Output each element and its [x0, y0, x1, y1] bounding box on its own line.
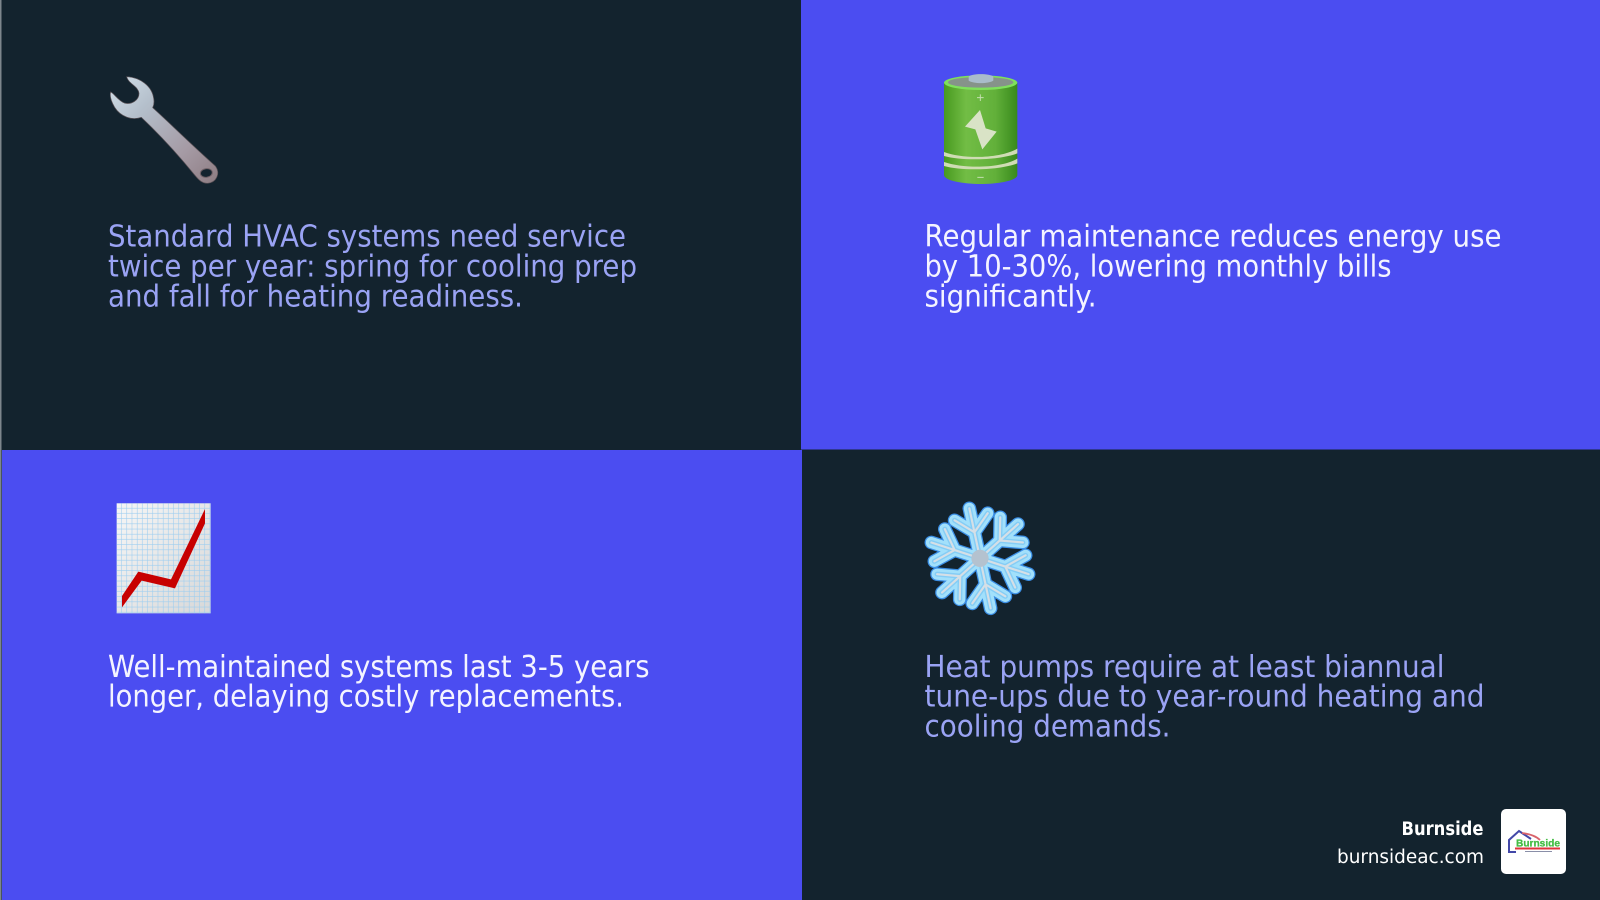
- text: system lifespan: Well-maintained systems last 3-5 years: [108, 650, 650, 685]
- panel: system lifespan: [2, 450, 802, 900]
- text: energy savings: Regular maintenance reduces energy use: [924, 220, 1502, 254]
- icon: wrench: [110, 77, 218, 183]
- panel: energy savings: [801, 0, 1600, 450]
- text: service frequency: and fall for heating readiness.: [108, 279, 523, 314]
- logo: [1501, 809, 1566, 874]
- text: energy savings: significantly.: [924, 279, 1096, 314]
- panel: heat pumps: [802, 450, 1600, 900]
- text: system lifespan: longer, delaying costly replacements.: [108, 680, 624, 715]
- text: service frequency: twice per year: spring for cooling prep: [108, 250, 637, 284]
- text: heat pumps: Heat pumps require at least biannual: [924, 650, 1444, 685]
- brand footer: [1337, 809, 1566, 874]
- icon: battery: [944, 74, 1017, 184]
- left edge strip: [0, 0, 2, 900]
- icon: rising chart: [117, 503, 211, 613]
- text: energy savings: by 10-30%, lowering monthly bills: [924, 250, 1392, 284]
- logo: Burnside: [1516, 838, 1560, 850]
- icon: snowflake: [918, 497, 1042, 619]
- text: heat pumps: cooling demands.: [924, 709, 1170, 744]
- panel: service frequency: [2, 0, 801, 450]
- brand name: Burnside: [1402, 819, 1484, 840]
- text: heat pumps: tune-ups due to year-round heating and: [924, 680, 1484, 715]
- text: service frequency: Standard HVAC systems need service: [108, 220, 626, 254]
- brand url: burnsideac.com: [1337, 847, 1484, 868]
